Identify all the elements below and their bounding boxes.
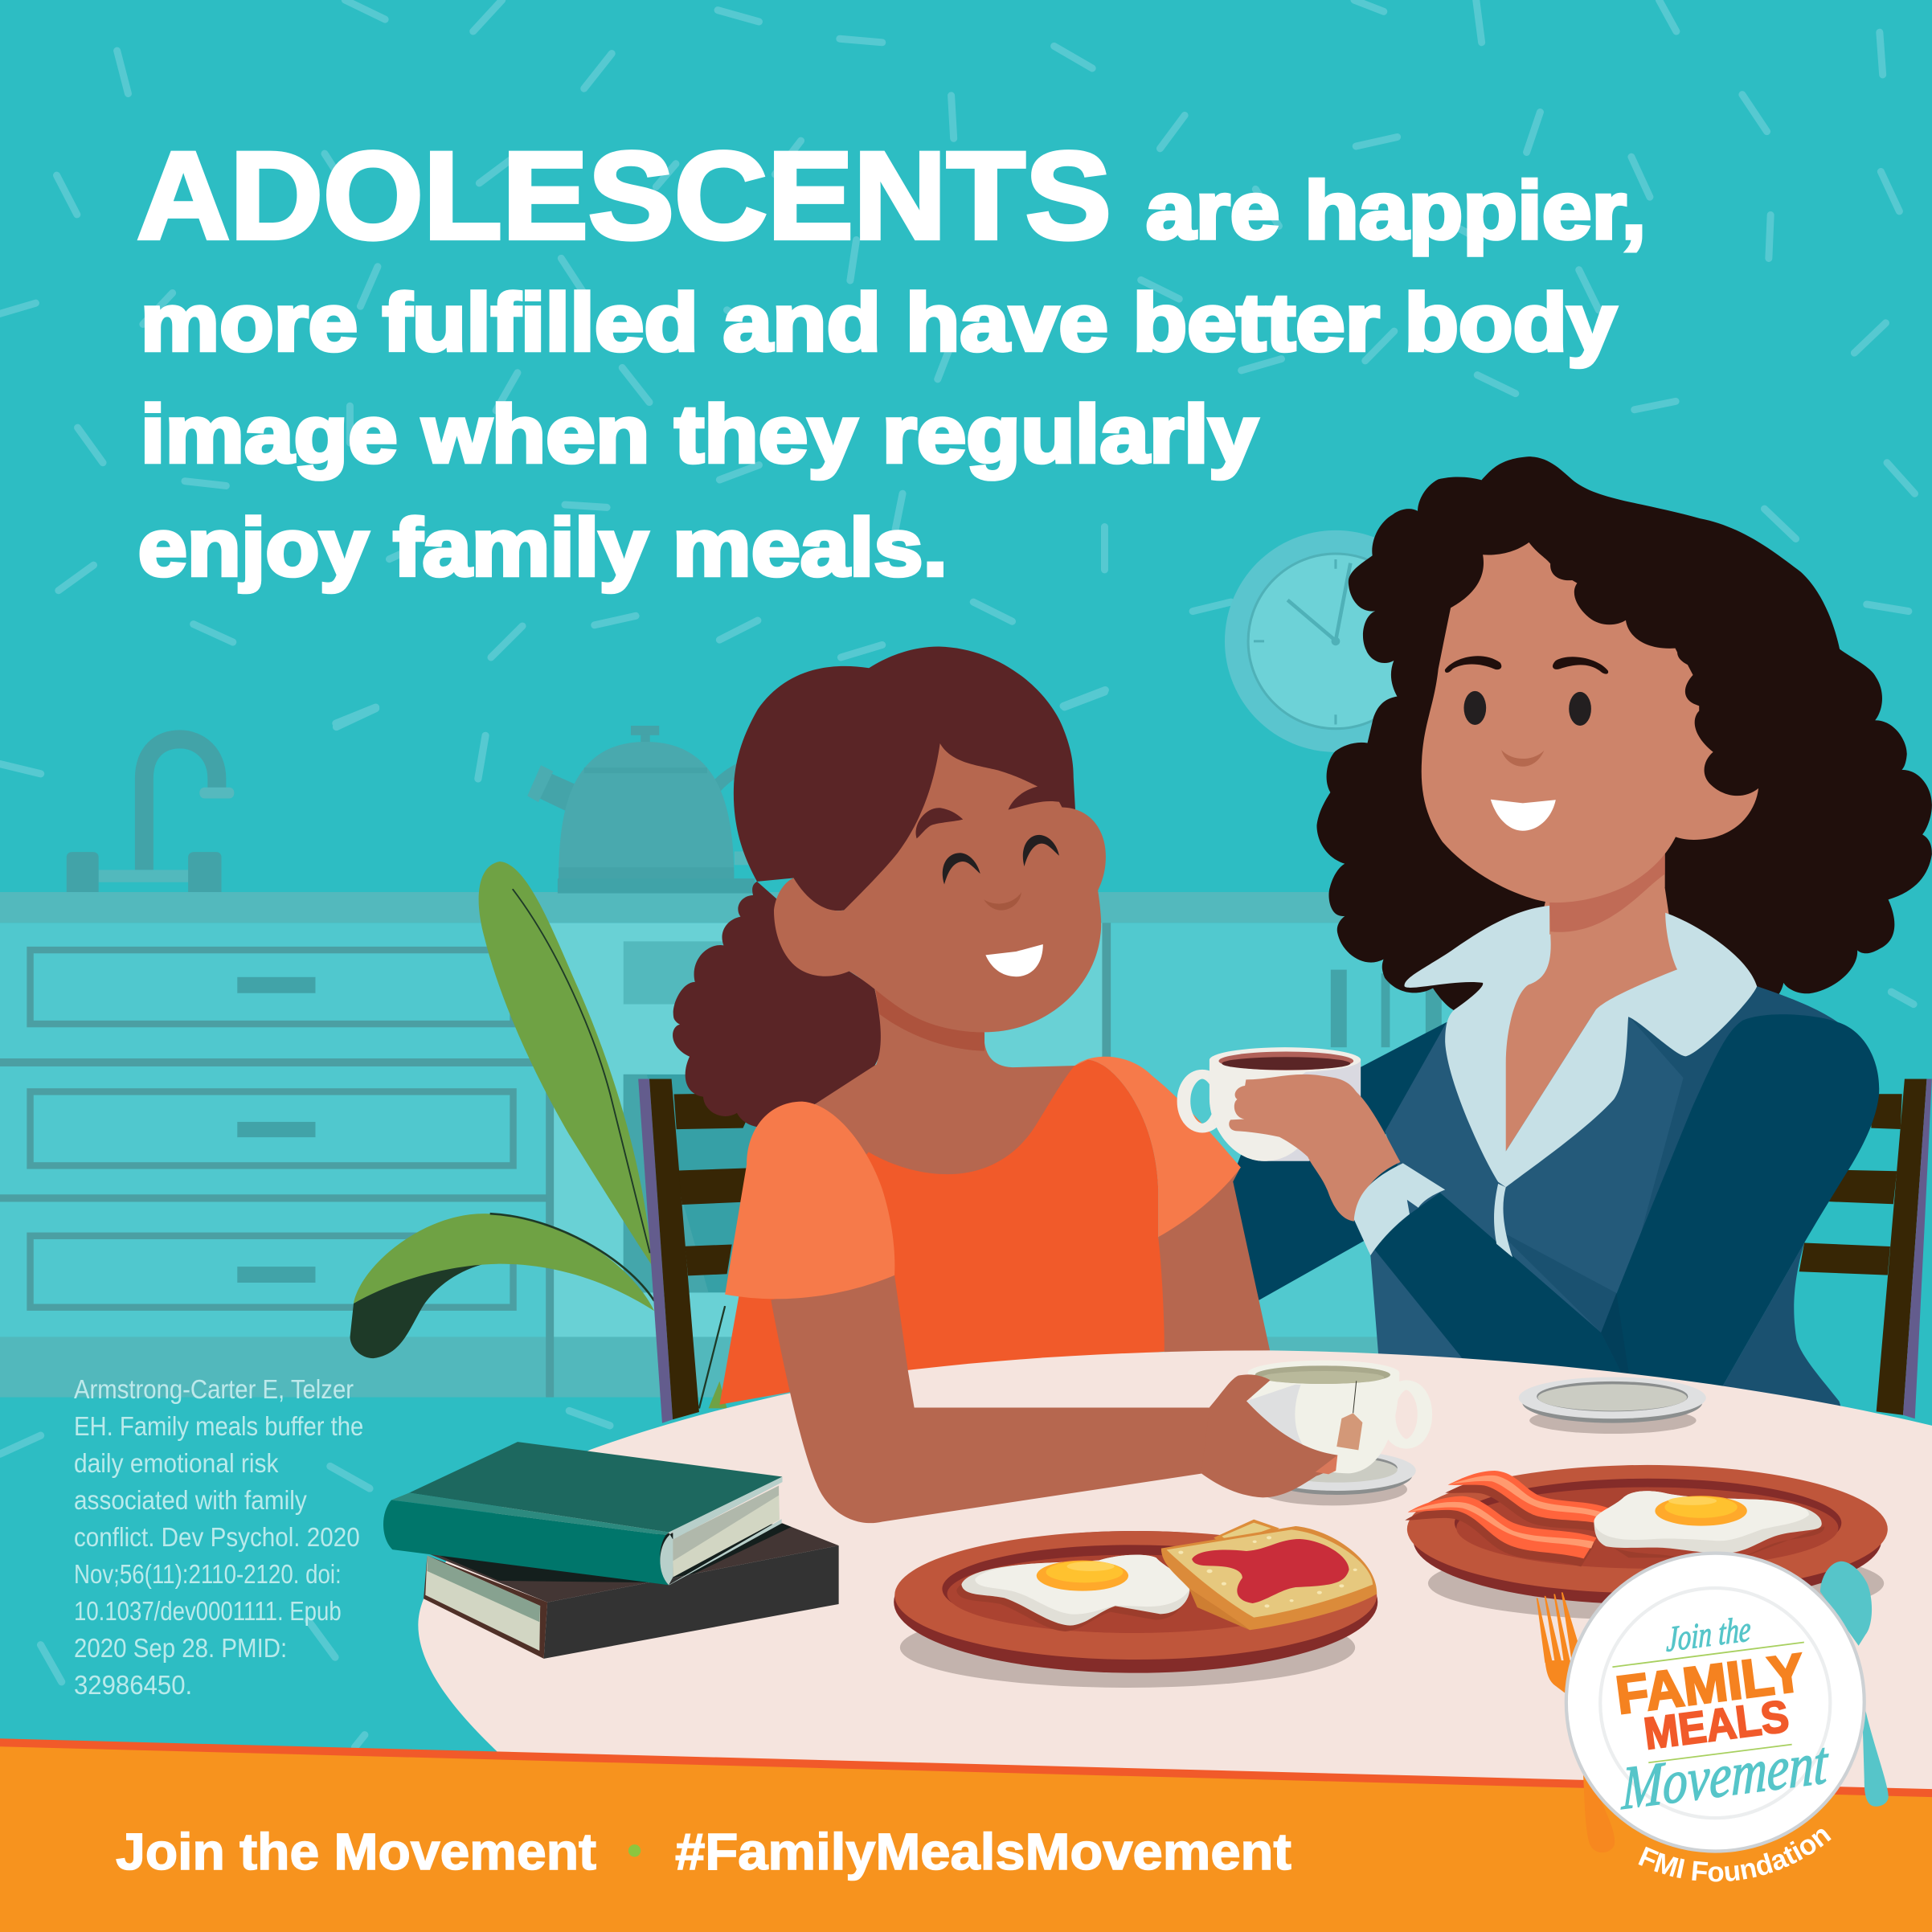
- footer band: #FamilyMealsMovement: [675, 1823, 1291, 1881]
- title: [137, 126, 1646, 593]
- citation text: Armstrong-Carter E, Telzer: [74, 1374, 354, 1405]
- title: image when they regularly: [141, 389, 1258, 480]
- logo: Family Meals Movement plate badge: Join the: [1666, 1608, 1751, 1660]
- title: enjoy family meals.: [138, 502, 948, 593]
- girl's arm and sleeve: [725, 1102, 1337, 1523]
- icon: kettle: [527, 726, 764, 894]
- citation text: conflict. Dev Psychol. 2020: [74, 1522, 360, 1553]
- mother body: blazer and shirt: [1230, 884, 1879, 1422]
- chair left: [638, 1079, 759, 1423]
- stack of books: [383, 1442, 839, 1659]
- footer band: Join the Movement: [116, 1823, 596, 1881]
- cup of coffee and mother's hand: [1184, 1047, 1445, 1255]
- citation text: 10.1037/dev0001111. Epub: [74, 1596, 342, 1627]
- logo: Family Meals Movement plate badge: Movement: [1621, 1728, 1829, 1823]
- plate with egg and toast: [894, 1520, 1377, 1688]
- citation text: [74, 1374, 363, 1701]
- mother's hand and forearm: [1229, 1074, 1400, 1222]
- footer band: [0, 1738, 1932, 1932]
- shirt cuff: [1354, 1163, 1445, 1255]
- plant: [350, 862, 727, 1408]
- citation text: associated with family: [74, 1485, 307, 1516]
- logo: Family Meals Movement plate badge: FAMILY: [1613, 1643, 1807, 1725]
- logo: Family Meals Movement plate badge: FMI Foundation: [1638, 1829, 1832, 1882]
- citation text: daily emotional risk: [74, 1448, 279, 1479]
- fried egg: [956, 1555, 1190, 1631]
- title: ADOLESCENTS: [137, 126, 1111, 265]
- kitchen background: [0, 530, 1463, 1398]
- plate with bacon and egg: [1405, 1465, 1888, 1620]
- mother chest skin: [1493, 884, 1677, 1152]
- girl torso and orange shirt: [719, 988, 1270, 1405]
- shirt collar: [1405, 906, 1757, 1187]
- citation text: EH. Family meals buffer the: [74, 1411, 363, 1442]
- mother face: [1422, 542, 1758, 935]
- girl's cup of tea: [1246, 1361, 1425, 1505]
- logo: Family Meals Movement plate badge: [1537, 1551, 1889, 1882]
- icon: fork: [1537, 1592, 1615, 1852]
- empty saucer: [1519, 1377, 1706, 1434]
- logo: Family Meals Movement plate badge: MEALS: [1641, 1690, 1791, 1759]
- girl hair: [673, 646, 1075, 1128]
- icon: wall clock: [1225, 530, 1447, 752]
- toast with jam: [1161, 1520, 1377, 1630]
- citation text: 32986450.: [74, 1670, 192, 1701]
- icon: faucet: [67, 739, 234, 892]
- mother hair: [1316, 456, 1932, 1011]
- title: more fulfilled and have better body: [141, 277, 1617, 368]
- chair right: [1799, 1079, 1932, 1418]
- citation text: Nov;56(11):2110-2120. doi:: [74, 1559, 342, 1590]
- icon: spoon: [1820, 1562, 1889, 1807]
- plate: [1566, 1553, 1864, 1851]
- citation text: 2020 Sep 28. PMID:: [74, 1633, 287, 1664]
- girl face: [774, 743, 1106, 1032]
- table: [418, 1350, 1932, 1811]
- fried egg: [1594, 1491, 1824, 1561]
- bacon strips: [1405, 1471, 1609, 1566]
- title: are happier,: [1146, 166, 1646, 256]
